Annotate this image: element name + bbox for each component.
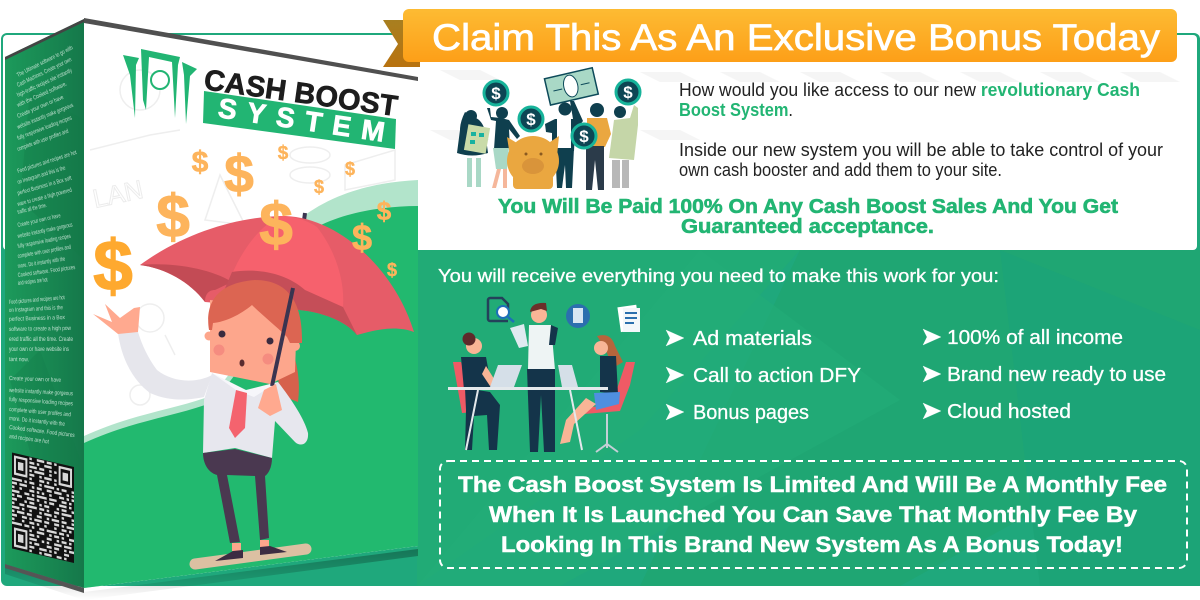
side text: more. Do it instantly with the xyxy=(17,256,66,270)
callout: limited monthly fee: The Cash Boost System Is Limited And Will Be A Monthly Fee xyxy=(458,472,1167,497)
icon: paper stack xyxy=(617,305,640,332)
benefit: call to action: Call to action DFY xyxy=(693,365,861,387)
side text: high-traffic recipes site instantly xyxy=(16,68,73,99)
illustration: group with piggy bank: $ xyxy=(579,127,589,146)
benefit: ad materials: Ad materials xyxy=(693,328,812,350)
side text: website instantly make gorgeous xyxy=(17,222,73,240)
side text: software to create a high pow xyxy=(9,326,72,333)
dollar signs: $ xyxy=(387,260,397,280)
dollar signs: $ xyxy=(345,159,355,179)
QR code xyxy=(12,452,74,563)
headline: paid 100 percent: Guaranteed acceptance. xyxy=(681,216,934,238)
side text: ware to create a high powered xyxy=(16,188,73,208)
icon: blue document xyxy=(566,304,590,328)
dollar signs: $ xyxy=(314,177,324,197)
side text: complete with user profiles and xyxy=(9,407,71,418)
tie xyxy=(229,390,247,438)
dollar signs: $ xyxy=(93,227,133,306)
side text: website instantly make gorgeous xyxy=(8,388,73,397)
side text: Food pictures and recipes are hot xyxy=(9,295,65,306)
dollar signs: $ xyxy=(192,146,209,179)
laptops xyxy=(490,365,578,387)
side text: fully responsive loading recipes xyxy=(9,397,73,407)
green hill light xyxy=(84,180,418,588)
hand xyxy=(93,304,140,334)
intro text: own cash booster and add them to your site. xyxy=(679,160,1002,180)
man standing xyxy=(510,303,558,452)
side text: ered traffic all the time. Create xyxy=(9,337,74,343)
side text: fully responsive loading recipes xyxy=(17,115,73,142)
head xyxy=(210,300,297,384)
dollar signs: $ xyxy=(259,191,293,258)
box side panel xyxy=(5,19,84,593)
side text: and recipes are hot xyxy=(18,277,48,287)
side text: perfect Business in a Box xyxy=(9,315,65,323)
list: left benefits xyxy=(666,328,861,424)
person 4 xyxy=(586,103,611,190)
panel: white upper section xyxy=(3,35,1197,250)
side text: Create your own or have xyxy=(16,95,65,120)
person 1 xyxy=(457,110,490,187)
side text: on Instagram and this is the xyxy=(9,305,64,314)
dollar signs: $ xyxy=(278,143,289,164)
icon: coins xyxy=(484,80,640,148)
list: right benefits xyxy=(923,327,1166,423)
person 3 xyxy=(545,101,583,188)
product box xyxy=(5,18,418,600)
intro text: Inside our new system you will be able to take control of your xyxy=(679,140,1163,160)
side text: Create your own or have xyxy=(9,376,62,384)
illustration: group with piggy bank: $ xyxy=(526,110,536,129)
person 5 xyxy=(609,105,638,188)
dollar signs: $ xyxy=(224,145,254,204)
side text: Cash Machines. Create your own xyxy=(16,57,73,89)
benefit: cloud hosted: Cloud hosted xyxy=(947,401,1071,423)
illustration: group with piggy bank: $ xyxy=(491,84,501,103)
side text xyxy=(8,45,78,446)
logo: banknotes xyxy=(123,49,197,124)
callout: limited monthly fee: When It Is Launched You Can Save That Monthly Fee By xyxy=(489,502,1138,527)
hair xyxy=(208,280,302,343)
fist xyxy=(258,384,282,416)
side text: on Instagram and this is the xyxy=(17,165,67,186)
side text: complete with user profiles and xyxy=(17,129,69,153)
side text: Cooked software. Food pictures xyxy=(9,425,75,439)
faint doodles xyxy=(90,70,395,405)
side text: Cooked software. Food pictures xyxy=(17,265,76,279)
ponytail xyxy=(275,340,299,402)
side text: website instantly make gorgeous xyxy=(16,103,74,131)
banner: claim bonus: Claim This As An Exclusive Bonus Today xyxy=(432,17,1161,58)
umbrella pole top xyxy=(303,213,305,228)
side text: perfect Business in a Box soft xyxy=(17,176,73,197)
side text: The Ultimate software to go with xyxy=(16,45,74,79)
ankles xyxy=(232,540,269,551)
dollar signs: $ xyxy=(377,196,392,226)
intro text: How would you like access to our new revolutionary Cash xyxy=(679,80,1140,100)
dollar signs xyxy=(93,143,397,306)
icon: document check xyxy=(488,298,514,322)
trousers xyxy=(203,449,272,543)
logo: cash boost: CASH BOOST xyxy=(202,64,400,123)
callout: limited monthly fee: Looking In This Brand New System As A Bonus Today! xyxy=(501,532,1123,557)
illustration: team at desk xyxy=(448,298,640,452)
person 2 xyxy=(487,107,520,188)
side text: tant now. xyxy=(9,357,29,363)
dollar signs: $ xyxy=(352,217,372,258)
illustration: group with piggy bank xyxy=(457,68,640,190)
side text: Create your own or have xyxy=(17,213,62,229)
piggy bank xyxy=(507,136,559,189)
benefit: bonus pages: Bonus pages xyxy=(693,402,809,424)
chairs xyxy=(453,362,635,414)
banner: claim bonus xyxy=(403,9,1177,62)
dollar signs: $ xyxy=(156,183,190,250)
umbrella pole xyxy=(272,288,293,386)
side text: traffic all the time. xyxy=(17,203,48,216)
shirt xyxy=(203,373,308,458)
headline: paid 100 percent: You Will Be Paid 100% On Any Cash Boost Sales And You Get xyxy=(498,196,1118,218)
benefit: income: 100% of all income xyxy=(947,327,1123,349)
ground xyxy=(195,549,306,564)
character xyxy=(93,280,308,561)
intro text: Boost System. xyxy=(679,100,793,120)
headline: paid 100 percent xyxy=(498,196,1118,238)
ear xyxy=(290,341,300,351)
woman left xyxy=(461,332,500,450)
illustration: group with piggy bank: $ xyxy=(623,83,633,102)
box front panel xyxy=(84,18,418,588)
shoes xyxy=(215,550,243,561)
side text: complete with user profiles and xyxy=(17,245,72,260)
raised arm xyxy=(118,332,212,400)
side text: your own or have website ins xyxy=(9,347,69,353)
woman right xyxy=(560,335,623,444)
side text: and recipes are hot xyxy=(9,434,49,446)
green hill dark xyxy=(84,206,418,588)
side text: with the Cooked software. xyxy=(16,81,68,109)
icon: banner ribbon fold xyxy=(383,20,420,67)
desk xyxy=(448,387,608,390)
benefit: brand new: Brand new ready to use xyxy=(947,364,1166,386)
side text: fully responsive loading recipes xyxy=(17,234,71,250)
side text: Food pictures and recipes are hot xyxy=(17,150,78,175)
callout: limited monthly fee xyxy=(440,461,1187,568)
faint doodles: LAN xyxy=(90,174,146,214)
side text: more. Do it instantly with the xyxy=(9,416,66,428)
heading: receive everything: You will receive everything you need to make this work for you: xyxy=(438,265,999,286)
intro text xyxy=(679,80,1163,180)
umbrella canopy xyxy=(140,216,414,335)
logo: system: SYSTEM xyxy=(216,92,387,148)
icon: banknote xyxy=(544,68,598,105)
box shadow xyxy=(5,549,418,600)
